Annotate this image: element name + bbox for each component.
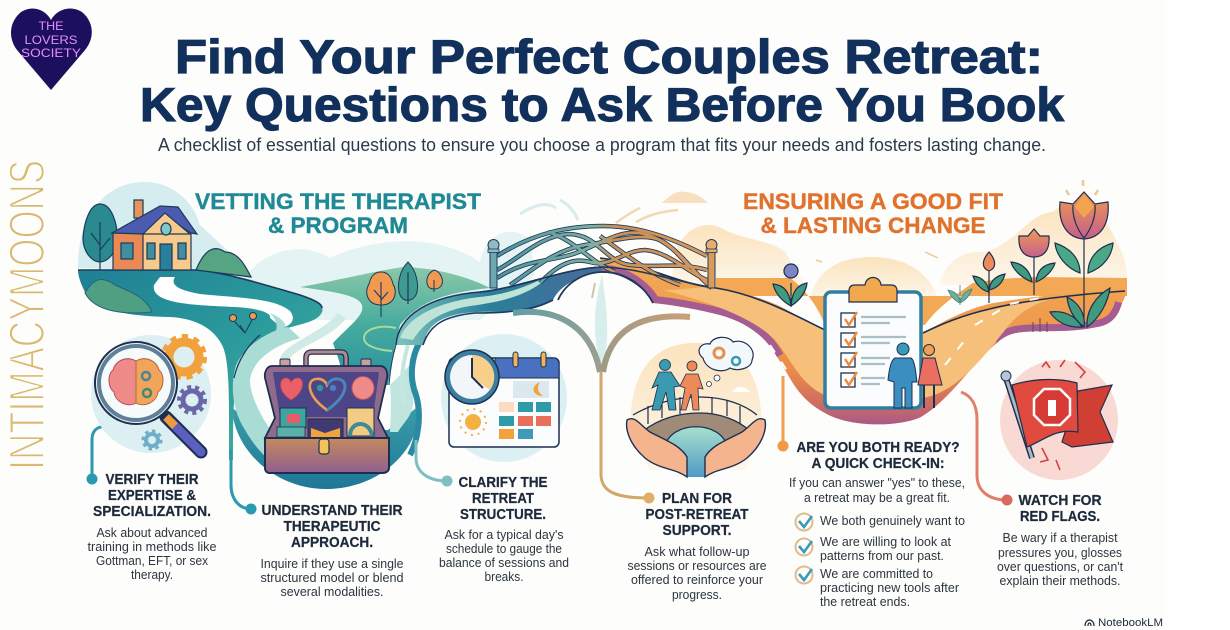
text: clarify structure: schedule to gauge the — [446, 542, 562, 556]
title: Key Questions to Ask Before You Book — [140, 78, 1065, 131]
icon: open toolbox — [265, 352, 389, 473]
text: verify expertise: therapy. — [131, 568, 173, 582]
text: verify expertise: EXPERTISE & — [108, 488, 196, 504]
title — [140, 30, 1065, 131]
text: understand approach: APPROACH. — [291, 535, 373, 551]
text: verify expertise: Ask about advanced — [96, 526, 208, 540]
text: clarify structure: CLARIFY THE — [458, 475, 548, 491]
section heading: ensuring — [743, 189, 1004, 238]
text: post-retreat support: PLAN FOR — [662, 491, 732, 507]
section heading: vetting — [195, 189, 482, 238]
text: understand approach: Inquire if they use a single — [260, 557, 404, 571]
text: ready check-in: patterns from our past. — [820, 549, 944, 563]
title: Find Your Perfect Couples Retreat: — [175, 30, 1043, 83]
logo: The Lovers Society heart: LOVERS — [24, 33, 78, 47]
icon: clipboard with checklist and couple — [825, 278, 942, 408]
text: post-retreat support: sessions or resources are — [628, 559, 767, 573]
icon: house — [112, 200, 251, 277]
text: post-retreat support: progress. — [672, 588, 722, 602]
text: post-retreat support: POST-RETREAT — [646, 507, 749, 523]
text: verify expertise: VERIFY THEIR — [106, 472, 199, 488]
text: verify expertise: SPECIALIZATION. — [93, 504, 211, 520]
text: ready check-in: We both genuinely want to — [820, 514, 965, 528]
subtitle: A checklist of essential questions to ensure you choose a program that fits your needs and fosters lasting change. — [158, 134, 1046, 155]
logo: The Lovers Society heart: SOCIETY — [21, 46, 81, 60]
icon: trees on hill — [83, 204, 442, 317]
purple underside band — [603, 272, 1122, 357]
text: clarify structure: RETREAT — [472, 491, 534, 507]
text: clarify structure — [439, 475, 569, 584]
icon: red flag — [1000, 360, 1118, 480]
text: understand approach: several modalities. — [280, 585, 384, 599]
text: ready check-in: a retreat may be a great fit. — [804, 491, 950, 505]
text: red flags — [997, 493, 1124, 588]
section heading: vetting: VETTING THE THERAPIST — [195, 189, 482, 214]
text: understand approach — [260, 503, 404, 599]
text: understand approach: UNDERSTAND THEIR — [262, 503, 403, 519]
section heading: ensuring: ENSURING A GOOD FIT — [743, 189, 1004, 214]
icon: growing flowers — [773, 180, 1113, 327]
landscape: left teal section — [78, 182, 603, 489]
icon: clock and calendar — [441, 334, 567, 462]
icon: magnifier with brain and gears — [91, 335, 211, 453]
icon: braided bridge — [480, 226, 717, 303]
text: red flags: Be wary if a therapist — [1002, 531, 1118, 545]
text: red flags: RED FLAGS. — [1020, 509, 1100, 525]
section heading: vetting: & PROGRAM — [268, 213, 408, 238]
text: clarify structure: STRUCTURE. — [460, 507, 546, 523]
vertical watermark: Intimacymoons: INTIMACYMOONS — [0, 160, 55, 470]
connectors and dots — [86, 372, 1012, 514]
text: ready check-in: the retreat ends. — [820, 595, 910, 609]
text: ready check-in: practicing new tools after — [820, 581, 959, 595]
connector: central split arch — [513, 275, 690, 372]
landscape: right orange section — [600, 180, 1127, 424]
text: post-retreat support: SUPPORT. — [662, 523, 732, 539]
text: ready check-in: ARE YOU BOTH READY? — [796, 440, 960, 456]
text: ready check-in: If you can answer "yes" to these, — [789, 476, 965, 490]
text: ready check-in: A QUICK CHECK-IN: — [812, 456, 944, 472]
logo: The Lovers Society heart: THE — [38, 19, 64, 33]
icon: check badges — [796, 514, 812, 584]
icon: small flowers on hill — [230, 312, 256, 333]
text: ready check-in: We are committed to — [820, 567, 933, 581]
text: ready check-in — [789, 440, 965, 609]
text: verify expertise: training in methods like — [88, 540, 217, 554]
icon: couple on bridge held by hands — [627, 337, 765, 477]
NotebookLM mark: NotebookLM — [1098, 617, 1163, 629]
text: verify expertise: Gottman, EFT, or sex — [96, 554, 209, 568]
text: verify expertise — [88, 472, 217, 582]
text: post-retreat support: offered to reinforce your — [631, 573, 763, 587]
text: understand approach: THERAPEUTIC — [284, 519, 381, 535]
text: post-retreat support — [628, 491, 767, 602]
text: ready check-in: We are willing to look at — [820, 535, 952, 549]
text: clarify structure: balance of sessions and — [439, 556, 569, 570]
text: red flags: over questions, or can't — [997, 560, 1124, 574]
text: red flags: explain their methods. — [1000, 574, 1120, 588]
text: red flags: WATCH FOR — [1018, 493, 1102, 509]
text: clarify structure: Ask for a typical day's — [444, 528, 564, 542]
logo: The Lovers Society heart — [11, 9, 92, 90]
text: red flags: pressures you, glosses — [998, 546, 1122, 560]
text: understand approach: structured model or blend — [260, 571, 404, 585]
section heading: ensuring: & LASTING CHANGE — [760, 213, 986, 238]
text: post-retreat support: Ask what follow-up — [644, 545, 750, 559]
text: clarify structure: breaks. — [484, 570, 524, 584]
